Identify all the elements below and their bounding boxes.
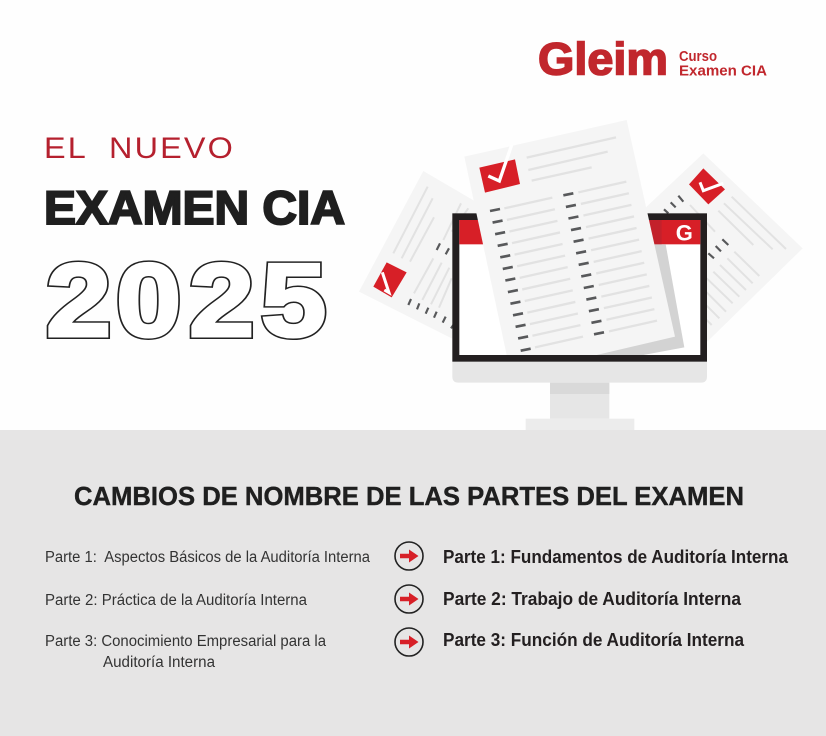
center exam paper: [464, 120, 675, 355]
center paper heading lines: [527, 137, 616, 181]
answer column 1: [490, 198, 583, 351]
left exam paper: [359, 171, 490, 350]
new name: parte 3: Parte 3: Función de Auditoría Interna: [443, 630, 745, 650]
G logo in header: G: [676, 221, 693, 246]
logo: Gleim Curso Examen CIA: [538, 34, 768, 84]
old name: parte 1: Parte 1: Aspectos Básicos de la Auditoría Interna: [45, 549, 370, 566]
left paper checkmark: [373, 262, 407, 297]
monitor chin: [452, 362, 707, 383]
title line: outlined 2025: 2025: [46, 242, 326, 358]
panel: name changes: [0, 430, 826, 736]
logo: Gleim Curso Examen CIA: Gleim: [538, 34, 668, 84]
center paper shadow: [597, 244, 684, 355]
arrow icon 1: [395, 542, 423, 570]
right exam paper: [617, 153, 803, 342]
monitor stand: [526, 383, 634, 431]
arrow icon 3: [395, 628, 423, 656]
old name: parte 3: Auditoría Interna: [103, 654, 215, 671]
right paper checkmark: [689, 168, 725, 204]
panel heading: CAMBIOS DE NOMBRE DE LAS PARTES DEL EXAMEN: [74, 481, 744, 511]
old name: parte 2: Parte 2: Práctica de la Auditoría Interna: [45, 592, 307, 609]
arrow icon 2: [395, 585, 423, 613]
monitor screen: [452, 213, 707, 362]
old name: parte 3: [45, 633, 326, 671]
new name: parte 2: Parte 2: Trabajo de Auditoría Interna: [443, 589, 742, 609]
title line: EL NUEVO: EL NUEVO: [44, 132, 235, 165]
logo: Gleim Curso Examen CIA: Curso: [679, 49, 717, 65]
title line: outlined 2025: 2025: [46, 242, 326, 358]
old name: parte 3: Parte 3: Conocimiento Empresarial para la: [45, 633, 326, 650]
screen header bar: [459, 220, 700, 244]
title line: EXAMEN CIA: EXAMEN CIA: [44, 181, 345, 234]
title block: [44, 132, 345, 358]
illustration: monitor and exam papers: [359, 120, 803, 431]
center paper checkbox: [479, 145, 520, 193]
logo: Gleim Curso Examen CIA: Examen CIA: [679, 64, 768, 80]
answer column 2: [563, 182, 657, 334]
new name: parte 1: Parte 1: Fundamentos de Auditoría Interna: [443, 547, 789, 567]
